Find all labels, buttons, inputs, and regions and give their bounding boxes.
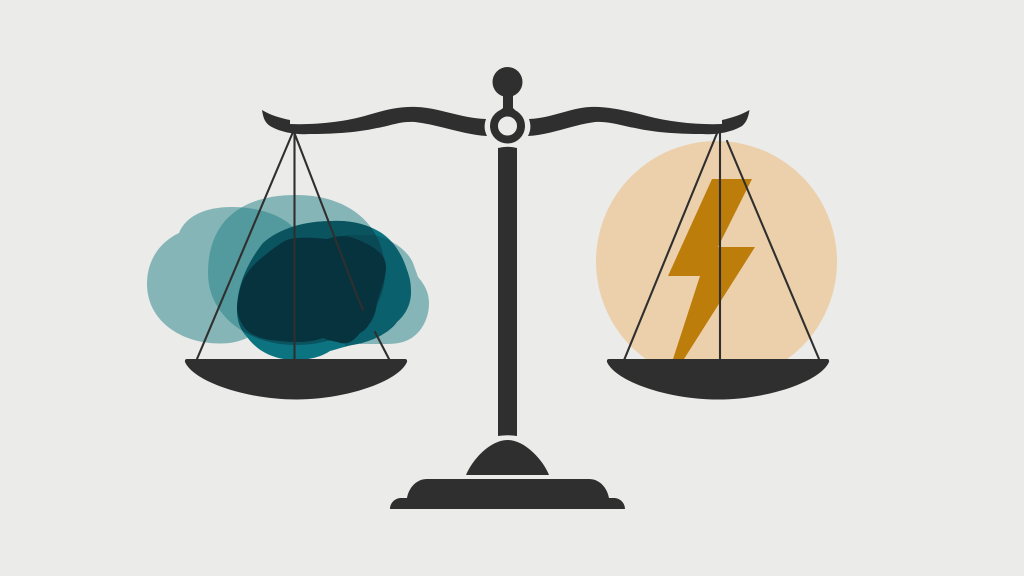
right pan bbox=[607, 359, 829, 400]
cloud: light left cloud bbox=[147, 207, 300, 344]
left beam arm bbox=[262, 107, 487, 136]
cloud group: overlapping teal clouds bbox=[147, 195, 429, 360]
sun disc bbox=[596, 141, 837, 382]
top knob bbox=[492, 67, 522, 112]
base dome bbox=[466, 440, 549, 475]
cloud: light right cloud bbox=[360, 235, 429, 344]
base plinth bbox=[390, 479, 625, 509]
icon: lightning bolt bbox=[668, 179, 755, 359]
cloud: top overlap shading bbox=[237, 220, 385, 345]
cloud: teal central cloud bbox=[237, 221, 411, 360]
central post bbox=[498, 147, 517, 436]
right pan strings bbox=[624, 132, 819, 359]
cloud: right overlap shading bbox=[345, 235, 411, 347]
left pan strings bbox=[197, 132, 389, 359]
cloud: dark core bbox=[237, 236, 386, 343]
cloud: light top cloud bbox=[208, 195, 385, 345]
pivot ring bbox=[494, 112, 521, 140]
infographic: balance scale bbox=[147, 67, 837, 509]
left pan bbox=[185, 359, 407, 400]
right beam arm bbox=[528, 107, 750, 136]
